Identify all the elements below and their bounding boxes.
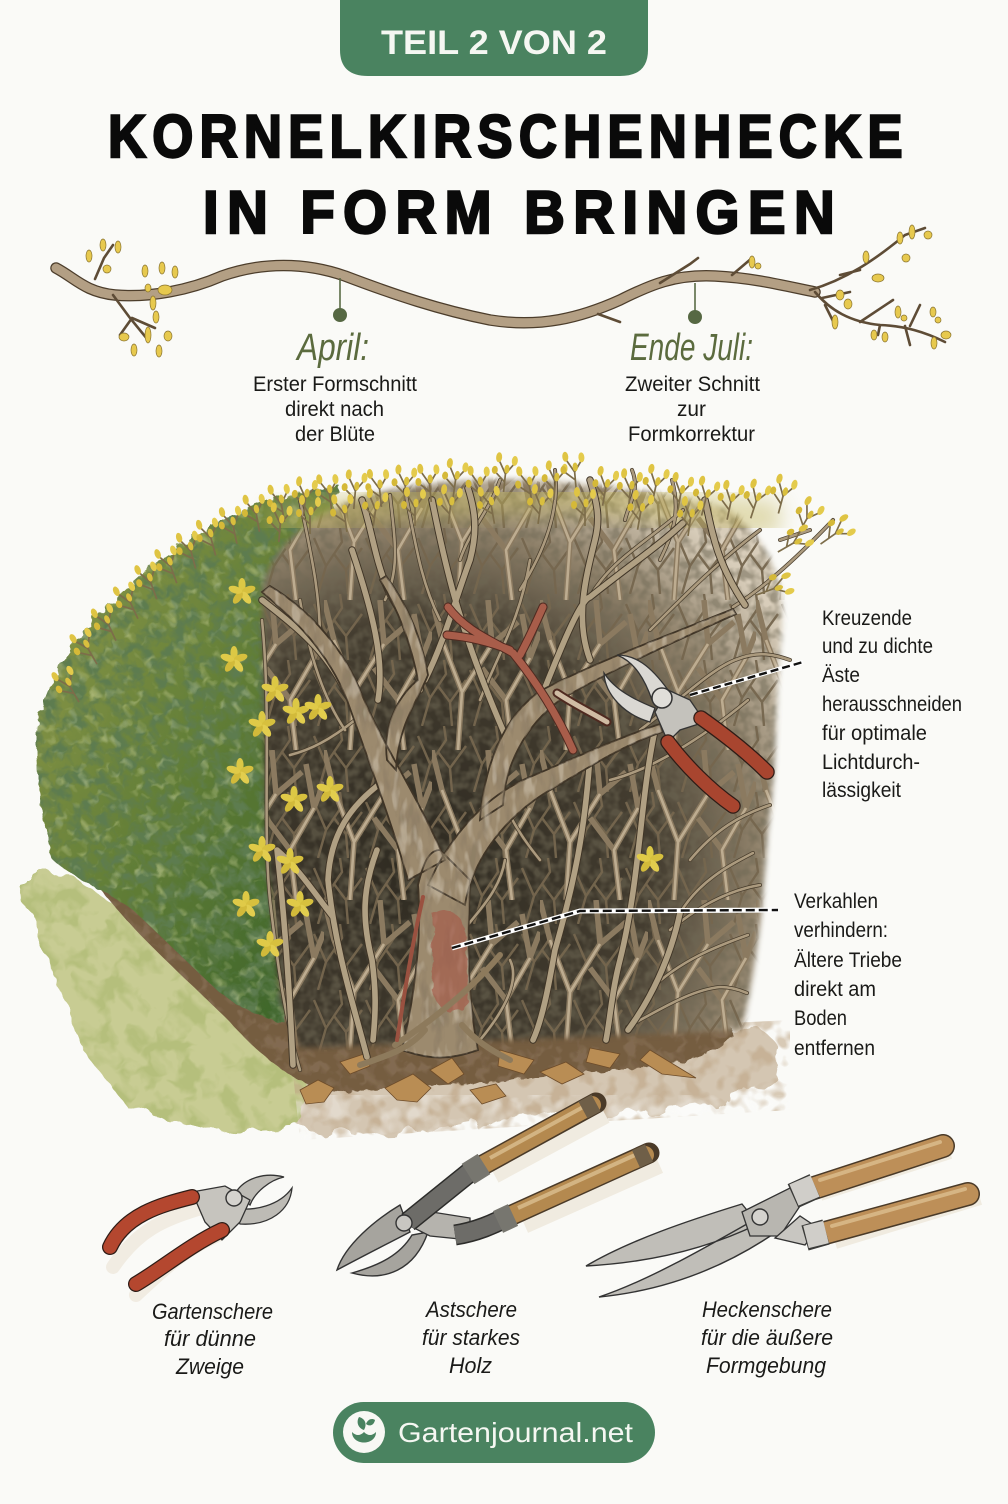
caption: Gartenschere: für dünne <box>164 1326 256 1351</box>
footer badge <box>333 1402 655 1463</box>
caption: Heckenschere <box>701 1297 833 1378</box>
hedge: red bark at the trunk <box>432 911 468 1012</box>
hedge: flowering twigs along the top edge <box>47 450 859 709</box>
annotation: crossing branches: Äste <box>822 663 860 687</box>
hedge: main tree branches <box>262 470 833 1070</box>
annotation: crossing branches: für optimale <box>822 721 927 745</box>
caption: Gartenschere: Zweige <box>175 1354 244 1379</box>
text block: Ende Juli: zur <box>677 397 706 421</box>
ground: dark leaf litter <box>90 880 740 1100</box>
ground: grass <box>20 868 307 1134</box>
annotation: crossing branches: herausschneiden <box>822 692 962 716</box>
annotation: crossing branches: und zu dichte <box>822 634 933 658</box>
hedge: green leafy side <box>30 480 340 1030</box>
text block: April: Erster Formschnitt <box>253 372 417 396</box>
caption: Gartenschere: Gartenschere <box>152 1299 273 1324</box>
text block: April: direkt nach <box>285 397 384 421</box>
text block: April <box>253 327 417 446</box>
title: IN FORM BRINGEN <box>203 179 835 246</box>
text block: Ende Juli: Formkorrektur <box>628 422 755 446</box>
callout line: crossing branches <box>690 662 803 695</box>
hedge: thick trunk and limbs <box>255 570 745 1070</box>
hedge <box>30 450 859 1070</box>
text block: April: April: <box>295 327 369 369</box>
callout line: old shoots <box>452 910 778 948</box>
icon: sprout logo <box>343 1411 385 1453</box>
text block: Ende Juli <box>625 327 760 446</box>
hedge: soft olive tint at the crown <box>270 495 780 525</box>
annotation: old shoots: Verkahlen <box>794 889 878 913</box>
timeline marker: Ende Juli <box>688 283 702 324</box>
tool: hedge shears <box>586 1142 980 1297</box>
annotation: crossing branches: lässigkeit <box>822 778 901 802</box>
text block: April: der Blüte <box>295 422 375 446</box>
annotation: crossing branches: Lichtdurch- <box>822 750 920 774</box>
hedge: red crossing branches <box>447 607 607 750</box>
annotation: old shoots: Ältere Triebe <box>794 948 902 972</box>
annotation: old shoots: direkt am <box>794 977 876 1001</box>
hedge: trunk roots and thin red stem <box>360 897 510 1065</box>
ground: pale soil <box>290 1020 800 1145</box>
annotation: old shoots <box>794 889 902 1060</box>
annotation: crossing branches <box>822 606 962 802</box>
caption: Astschere: für starkes <box>422 1325 520 1350</box>
ground: fallen leaves <box>300 1048 696 1104</box>
hedge: yellow flowers at the hedge corner <box>220 578 664 958</box>
caption: Astschere: Astschere <box>424 1297 517 1322</box>
caption: Astschere: Holz <box>449 1353 492 1378</box>
annotation: old shoots: Boden <box>794 1006 847 1030</box>
caption: Gartenschere <box>152 1299 273 1379</box>
title <box>108 103 903 246</box>
caption: Astschere <box>422 1297 520 1378</box>
pruner on branch <box>604 655 767 806</box>
caption: Heckenschere: Formgebung <box>706 1353 826 1378</box>
caption: Heckenschere: für die äußere <box>701 1325 833 1350</box>
timeline marker: April <box>333 278 347 322</box>
caption: Heckenschere: Heckenschere <box>702 1297 832 1322</box>
title: KORNELKIRSCHENHECKE <box>108 103 903 170</box>
header tab: TEIL 2 VON 2 <box>381 24 607 62</box>
text block: Ende Juli: Ende Juli: <box>630 327 753 369</box>
footer badge: Gartenjournal.net <box>398 1417 633 1448</box>
hedge: dark branch interior <box>260 476 786 1050</box>
timeline branch <box>56 225 951 357</box>
annotation: old shoots: entfernen <box>794 1036 875 1060</box>
annotation: old shoots: verhindern: <box>794 918 888 942</box>
tool: loppers <box>337 1103 660 1276</box>
header tab <box>340 0 648 76</box>
tool: garden shears <box>110 1175 292 1295</box>
text block: Ende Juli: Zweiter Schnitt <box>625 372 760 396</box>
annotation: crossing branches: Kreuzende <box>822 606 912 630</box>
